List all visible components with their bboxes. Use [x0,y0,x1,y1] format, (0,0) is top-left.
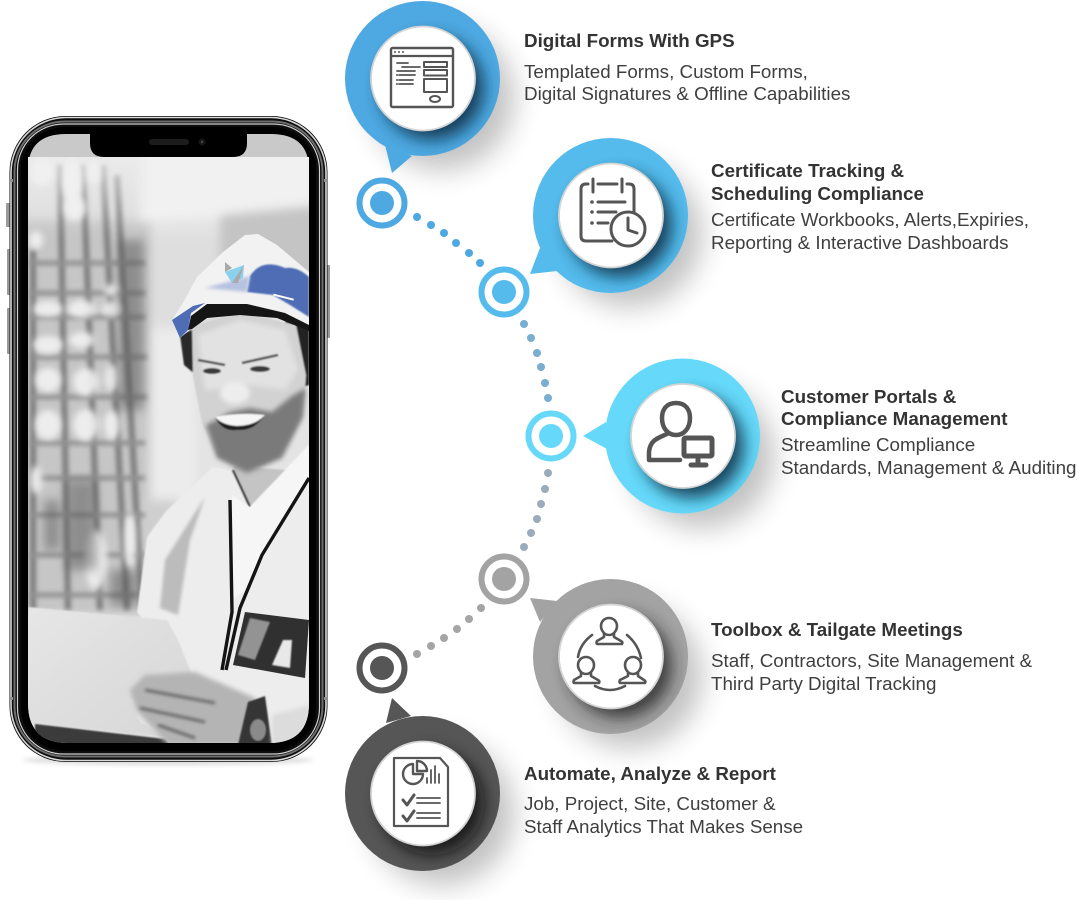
hard hat [172,234,309,338]
badge [233,612,309,678]
phone side buttons [6,203,330,354]
rebar grid [28,165,147,610]
dotted connector: blue segment [413,213,484,267]
text: certificate tracking: Reporting & Interactive Dashboards [711,232,1009,253]
hand and watch [130,672,309,745]
rebar dark blocks [44,240,144,606]
text: customer portals: Compliance Management [781,408,1008,429]
text: digital forms: Digital Forms With GPS [524,30,735,51]
text: customer portals: Streamline Compliance [781,434,975,455]
text: certificate tracking: Scheduling Compliance [711,183,924,204]
phone ground shadow [23,755,313,765]
face [180,312,309,473]
text: automate and report: Job, Project, Site, Customer & [524,793,776,814]
text: digital forms: Digital Signatures & Offline Capabilities [524,83,850,104]
text: customer portals [781,386,1076,478]
icon: analytics report document [394,758,448,826]
screen side bezels [21,160,316,710]
text: digital forms: Templated Forms, Custom Forms, [524,61,808,82]
screen top bar with notch [28,133,309,170]
bubble: automate and report [345,698,514,885]
text: certificate tracking [711,160,1029,253]
text: automate and report: Staff Analytics That Makes Sense [524,816,803,837]
dotted connector: grey segment [413,604,485,658]
neck [233,466,286,507]
timeline node 5 [360,646,404,690]
phone mockup [6,116,330,765]
blurred background [20,150,320,615]
lanyard [222,478,309,670]
rebar highlights [29,158,136,590]
text: certificate tracking: Certificate Workbooks, Alerts,Expiries, [711,209,1029,230]
timeline node 4 [482,556,526,602]
fade rebar towards the top [28,157,138,226]
shirt [137,445,309,743]
timeline node 2 [482,270,526,314]
text: customer portals: Customer Portals & [781,386,956,407]
text: certificate tracking: Certificate Tracking & [711,160,904,181]
bubble: certificate tracking [530,138,702,307]
icon: calendar with clock [581,179,645,246]
bubble: digital forms [345,1,514,173]
text: automate and report: Automate, Analyze & Report [524,763,777,784]
phone body [10,116,328,762]
timeline node 1 [360,180,404,226]
worker photo [20,150,320,747]
text: toolbox meetings [711,619,1033,694]
dotted connector: blue-grey segment [520,469,552,551]
dotted connector: light blue segment [520,320,552,402]
text: toolbox meetings: Third Party Digital Tracking [711,673,936,694]
timeline node 3 [528,414,574,458]
text: toolbox meetings: Staff, Contractors, Site Management & [711,650,1033,671]
icon: user with monitor [649,403,712,465]
icon: three people in a circle [574,618,645,690]
text: toolbox meetings: Toolbox & Tailgate Meetings [711,619,963,640]
text: digital forms [524,30,850,104]
bubble: customer portals [583,358,774,528]
bubble: toolbox meetings [530,579,702,748]
text: customer portals: Standards, Management & Auditing [781,457,1076,478]
icon: web form [391,48,453,107]
tablet [28,607,192,737]
text: automate and report [524,763,803,837]
metal antenna marks [9,179,328,700]
